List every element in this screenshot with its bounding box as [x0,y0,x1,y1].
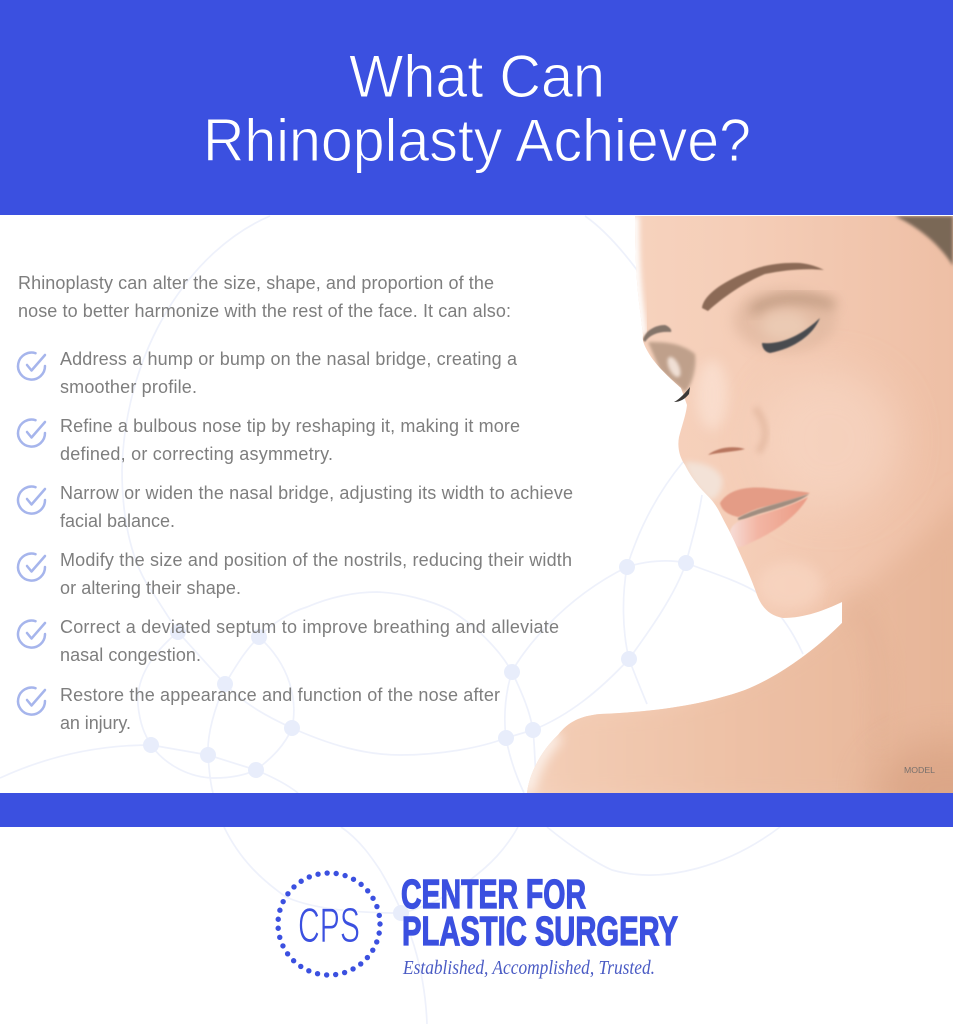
text: nostrils [60,550,572,598]
nostril [708,447,745,455]
bottom-right shade [872,740,953,793]
model photo [527,216,953,793]
text: septum: nasal congestion. [60,645,201,665]
icon: check [18,487,45,514]
nose highlight and shading [696,360,728,430]
far eye socket [648,342,695,392]
text: bridge: Narrow or widen the nasal bridge, adjusting its width to achieve [60,483,573,503]
title [203,43,751,174]
intro paragraph: nose to better harmonize with the rest of the face. It can also: [18,301,511,321]
chin glow [765,565,818,604]
logo wordmark [401,871,678,954]
upper lip [720,488,810,517]
left eyebrow [643,325,671,342]
right eyebrow [702,263,824,311]
benefit item: injury [18,685,500,733]
model caption: MODEL [904,765,935,775]
text: injury: an injury. [60,713,131,733]
eye socket shading [733,288,837,352]
text: hump: smoother profile. [60,377,197,397]
icon: check [18,420,45,447]
icon: check [18,621,45,648]
logo tagline: Established, Accomplished, Trusted. [402,957,655,979]
title: Rhinoplasty Achieve? [203,107,751,174]
closed eye [762,318,820,353]
text: tip: Refine a bulbous nose tip by reshaping it, making it more [60,416,520,436]
text: nostrils: or altering their shape. [60,578,241,598]
intro paragraph: Rhinoplasty can alter the size, shape, and proportion of the [18,273,494,293]
text: injury: Restore the appearance and function of the nose after [60,685,500,705]
lower lip [730,497,808,547]
text: bridge [60,483,573,531]
mouth opening [738,494,809,520]
logo monogram: CPS [298,899,360,953]
header band [0,0,953,215]
icon: check [18,688,45,715]
text: septum: Correct a deviated septum to improve breathing and alleviate [60,617,559,637]
far eye lashes [674,387,690,402]
text: tip [60,416,520,464]
intro paragraph [18,273,511,321]
text: tip: defined, or correcting asymmetry. [60,444,333,464]
icon: check [18,353,45,380]
background molecular network [0,216,803,1024]
hair [895,216,953,266]
benefit item: hump [18,349,518,397]
logo dotted ring [278,873,380,975]
text: injury [60,685,500,733]
benefit item: tip [18,416,520,464]
text: nostrils: Modify the size and position of the nostrils, reducing their width [60,550,572,570]
philtrum pale area [684,462,722,500]
footer band [0,793,953,827]
cheek glow [778,378,898,502]
icon: check [18,554,45,581]
benefit item: bridge [18,483,573,531]
logo wordmark: CENTER FOR [401,871,586,917]
logo [278,871,678,979]
logo wordmark: PLASTIC SURGERY [402,908,678,954]
benefit item: nostrils [18,550,572,598]
neck crease shading [845,600,884,740]
text: hump [60,349,518,397]
neck and shoulder [527,515,953,793]
text: hump: Address a hump or bump on the nasal bridge, creating a [60,349,518,369]
benefit item: septum [18,617,559,665]
network nodes [143,555,694,921]
text: septum [60,617,559,665]
text: bridge: facial balance. [60,511,175,531]
title: What Can [349,43,605,110]
soft fading edges [635,216,643,335]
